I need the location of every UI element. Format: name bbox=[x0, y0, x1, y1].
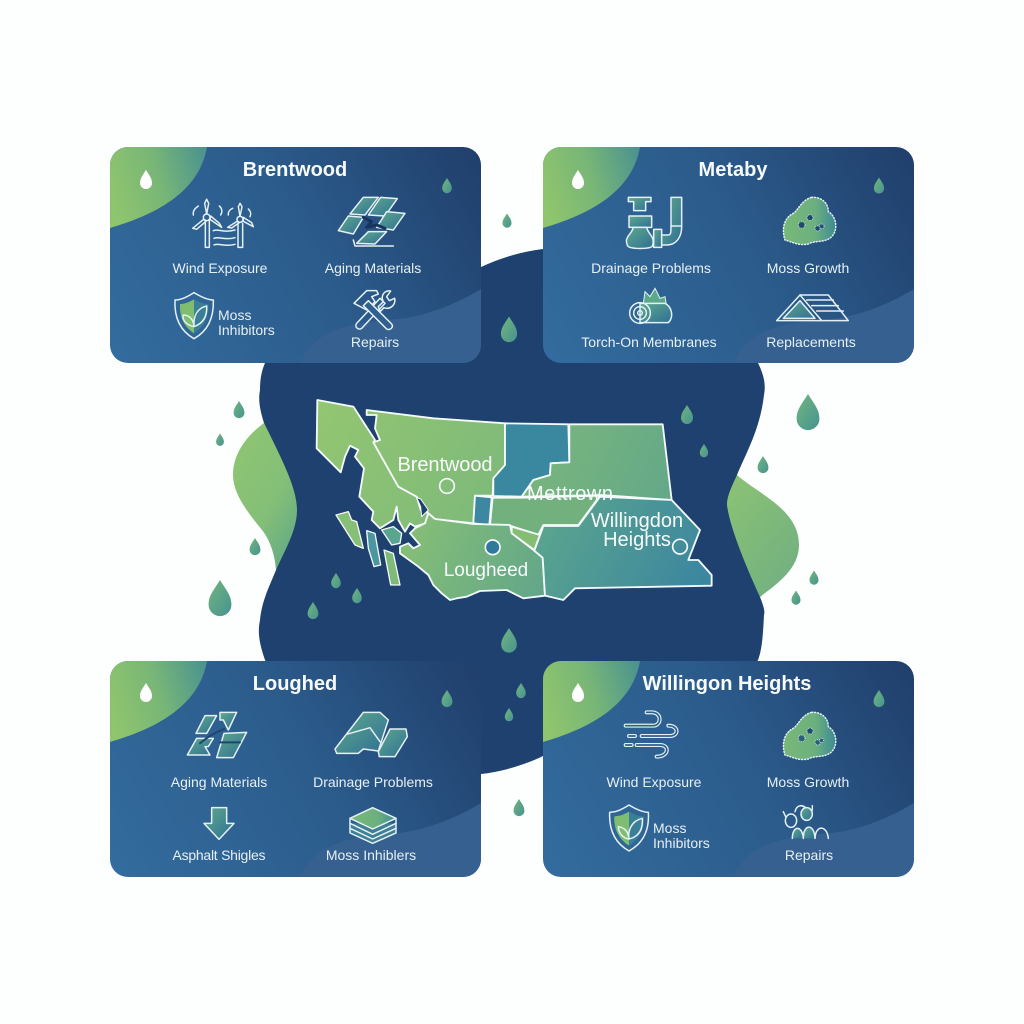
panel: Metaby bbox=[543, 147, 914, 363]
label: Torch-On Membranes bbox=[581, 334, 717, 350]
label: Moss Growth bbox=[767, 260, 849, 276]
region: Brentwood bbox=[367, 410, 505, 523]
label: Repairs bbox=[351, 334, 399, 350]
central navy blob bbox=[259, 249, 765, 774]
heading: Loughed bbox=[253, 673, 337, 695]
water drops bbox=[209, 214, 819, 816]
label: Moss bbox=[653, 820, 686, 836]
label: Aging Materials bbox=[171, 774, 267, 790]
decorative green blob right bbox=[700, 475, 799, 597]
map label: Brentwood: Brentwood bbox=[398, 454, 492, 476]
region: teal north bbox=[493, 423, 569, 497]
icon: white drop bbox=[572, 683, 584, 702]
icon: green drop bbox=[874, 690, 884, 707]
icon: white drop bbox=[572, 170, 584, 189]
label: Drainage Problems bbox=[591, 260, 711, 276]
map label: Willingdon Heights: Willingdon bbox=[591, 510, 683, 532]
decorative green blob left bbox=[233, 423, 320, 570]
map label: Mettrown: Mettrown bbox=[527, 483, 613, 505]
map of regions bbox=[317, 400, 712, 600]
icon: green drop bbox=[442, 178, 452, 193]
label: Aging Materials bbox=[325, 260, 421, 276]
label: Replacements bbox=[766, 334, 856, 350]
islands bbox=[336, 512, 402, 585]
icon: roof bbox=[777, 295, 848, 321]
icon: wind swirls bbox=[626, 712, 677, 757]
icon: down arrow bbox=[204, 808, 234, 839]
icon: shield with leaf bbox=[175, 293, 213, 339]
label: Inhibitors bbox=[653, 835, 710, 851]
label: Drainage Problems bbox=[313, 774, 433, 790]
region: Willingdon Heights bbox=[534, 497, 712, 600]
icon: wind turbines bbox=[193, 199, 253, 247]
marker: Lougheed bbox=[485, 540, 500, 555]
map label: Willingdon Heights: Heights bbox=[603, 529, 671, 551]
region: small teal block bbox=[473, 496, 492, 525]
label: Wind Exposure bbox=[173, 260, 268, 276]
icon: moss patch bbox=[783, 712, 836, 760]
panel: Brentwood bbox=[110, 147, 481, 363]
region: Mettrown bbox=[490, 496, 600, 535]
label: Wind Exposure bbox=[607, 774, 702, 790]
icon: white drop bbox=[140, 683, 152, 702]
label: Inhibitors bbox=[218, 322, 275, 338]
icon: torch-on membrane roll bbox=[630, 288, 672, 323]
marker: Brentwood bbox=[440, 479, 454, 493]
heading: Metaby bbox=[699, 159, 768, 181]
icon: bubbles and arches bbox=[783, 806, 828, 838]
icon: green drop bbox=[442, 690, 452, 707]
icon: hammer and wrench bbox=[354, 291, 395, 329]
label: Asphalt Shigles bbox=[172, 847, 266, 863]
icon: moss patch bbox=[783, 197, 836, 245]
icon: cracked tiles bbox=[338, 197, 405, 246]
icon: broken tiles bbox=[187, 712, 247, 758]
icon: drainage pipes bbox=[626, 197, 682, 248]
marker: Willingdon Heights bbox=[673, 539, 687, 554]
region: northeast bbox=[522, 424, 672, 500]
panel: Willingon Heights bbox=[543, 661, 914, 877]
label: Moss bbox=[218, 307, 251, 323]
heading: Willingon Heights bbox=[643, 673, 811, 695]
icon: shield with leaf bbox=[610, 805, 648, 851]
region: small green wedge bbox=[512, 527, 540, 550]
panel: Loughed bbox=[110, 661, 481, 877]
heading: Brentwood bbox=[243, 159, 347, 181]
map label: Lougheed: Lougheed bbox=[444, 560, 528, 581]
label: Moss Growth bbox=[767, 774, 849, 790]
label: Moss Inhiblers bbox=[326, 847, 416, 863]
region: Lougheed bbox=[400, 513, 545, 600]
label: Repairs bbox=[785, 847, 833, 863]
lake inlet bbox=[417, 498, 428, 517]
region: northwest coast bbox=[317, 400, 428, 532]
icon: green drop bbox=[874, 178, 884, 194]
icon: drainage slab bbox=[335, 712, 407, 757]
icon: white drop bbox=[140, 170, 152, 189]
icon: stacked layers bbox=[350, 808, 396, 843]
